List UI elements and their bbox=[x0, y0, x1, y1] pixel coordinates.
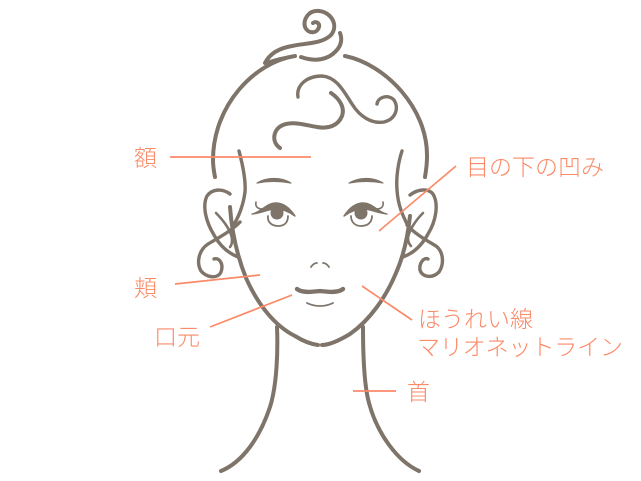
eye: left bbox=[252, 202, 295, 226]
leader lines bbox=[170, 157, 456, 391]
face: jaw outline bbox=[230, 207, 410, 345]
mouth bbox=[297, 289, 343, 306]
hair: top bun curl bbox=[265, 11, 341, 63]
label: cheek: 頬 bbox=[134, 275, 157, 301]
label: nasolabial and marionette lines: マリオネットライン bbox=[417, 334, 623, 360]
label: nasolabial and marionette lines: ほうれい線 bbox=[418, 306, 533, 332]
eyebrow: left bbox=[257, 178, 291, 183]
nose bbox=[311, 263, 329, 267]
ear: right bbox=[403, 190, 442, 276]
hair: forehead curl left bbox=[274, 93, 343, 148]
neck bbox=[221, 327, 419, 471]
eye: right bbox=[344, 202, 387, 226]
ear: left bbox=[199, 190, 240, 277]
label: mouth corner: 口元 bbox=[154, 324, 200, 350]
face: temple lines bbox=[233, 151, 408, 226]
label: neck: 首 bbox=[407, 379, 430, 405]
label: under eye: 目の下の凹み bbox=[466, 154, 604, 180]
hair: head outline bbox=[213, 56, 427, 177]
hair: forehead curl right bbox=[298, 76, 396, 122]
label: nasolabial and marionette lines bbox=[417, 306, 623, 360]
illustration: face line drawing bbox=[199, 11, 442, 471]
label: forehead: 額 bbox=[134, 145, 157, 171]
eyebrow: right bbox=[349, 178, 383, 183]
